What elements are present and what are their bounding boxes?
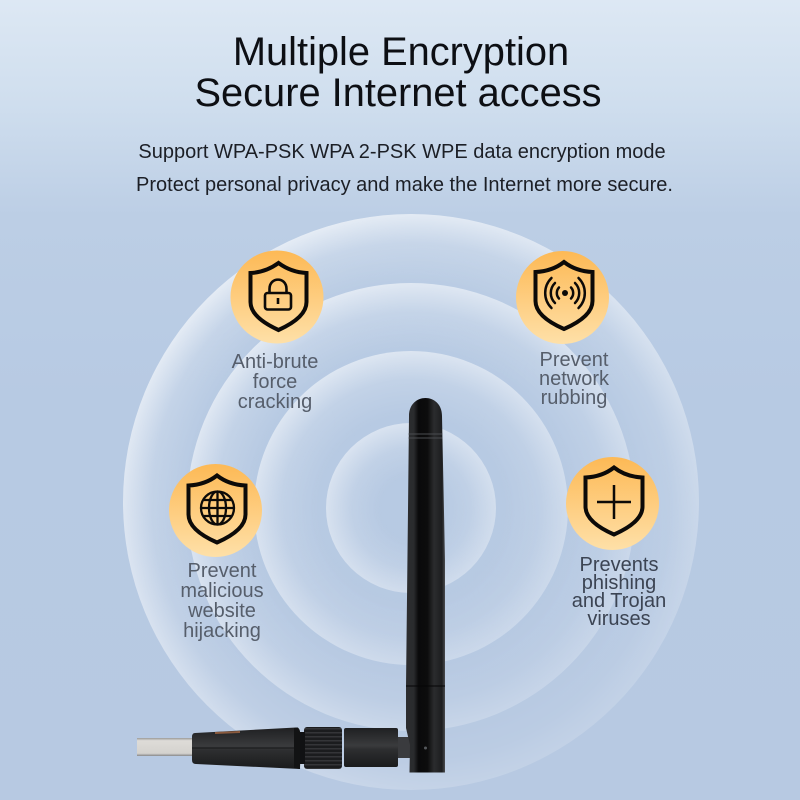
label: prevent malicious website hijacking: website — [188, 600, 256, 622]
label: prevents phishing and Trojan viruses: viruses — [587, 608, 651, 630]
antenna seam — [406, 685, 445, 687]
USB metal plug — [137, 738, 194, 756]
label: prevent malicious website hijacking — [180, 560, 264, 642]
title: Multiple Encryption — [233, 30, 569, 74]
label: anti-brute force cracking: force — [253, 371, 297, 393]
title: Secure Internet access — [194, 71, 602, 115]
icon: shield with globe — [169, 464, 262, 557]
icon: shield with wifi signal — [516, 251, 609, 344]
label: anti-brute force cracking: Anti-brute — [232, 351, 318, 373]
label: prevent malicious website hijacking: Prevent — [188, 560, 256, 582]
icon: shield with padlock — [230, 250, 324, 344]
label: anti-brute force cracking: cracking — [238, 391, 312, 413]
label: prevents phishing and Trojan viruses: Prevents — [580, 554, 658, 576]
USB body — [192, 727, 300, 769]
indicator hole — [424, 746, 427, 750]
label: prevents phishing and Trojan viruses: phishing — [582, 572, 656, 594]
label: prevent network rubbing: Prevent — [540, 349, 608, 371]
connector stub — [396, 737, 412, 758]
label: prevent malicious website hijacking: malicious — [180, 580, 264, 602]
label: prevents phishing and Trojan viruses: and Trojan — [572, 590, 666, 612]
swivel barrel — [344, 728, 398, 767]
antenna body — [406, 398, 445, 772]
label: prevent network rubbing: network — [539, 368, 609, 390]
swivel knurled joint — [304, 727, 342, 769]
title — [194, 30, 602, 115]
label: prevent network rubbing — [539, 349, 609, 409]
subtitle line 2: Protect personal privacy and make the Internet more secure. — [136, 174, 673, 196]
label: prevents phishing and Trojan viruses — [572, 554, 666, 630]
label: prevent network rubbing: rubbing — [541, 387, 607, 409]
label: prevent malicious website hijacking: hijacking — [183, 620, 261, 642]
icon: shield with plus — [566, 457, 659, 550]
subtitle line 1: Support WPA-PSK WPA 2-PSK WPE data encryption mode — [138, 141, 666, 163]
antenna rings — [408, 434, 442, 438]
label: anti-brute force cracking — [232, 351, 318, 413]
